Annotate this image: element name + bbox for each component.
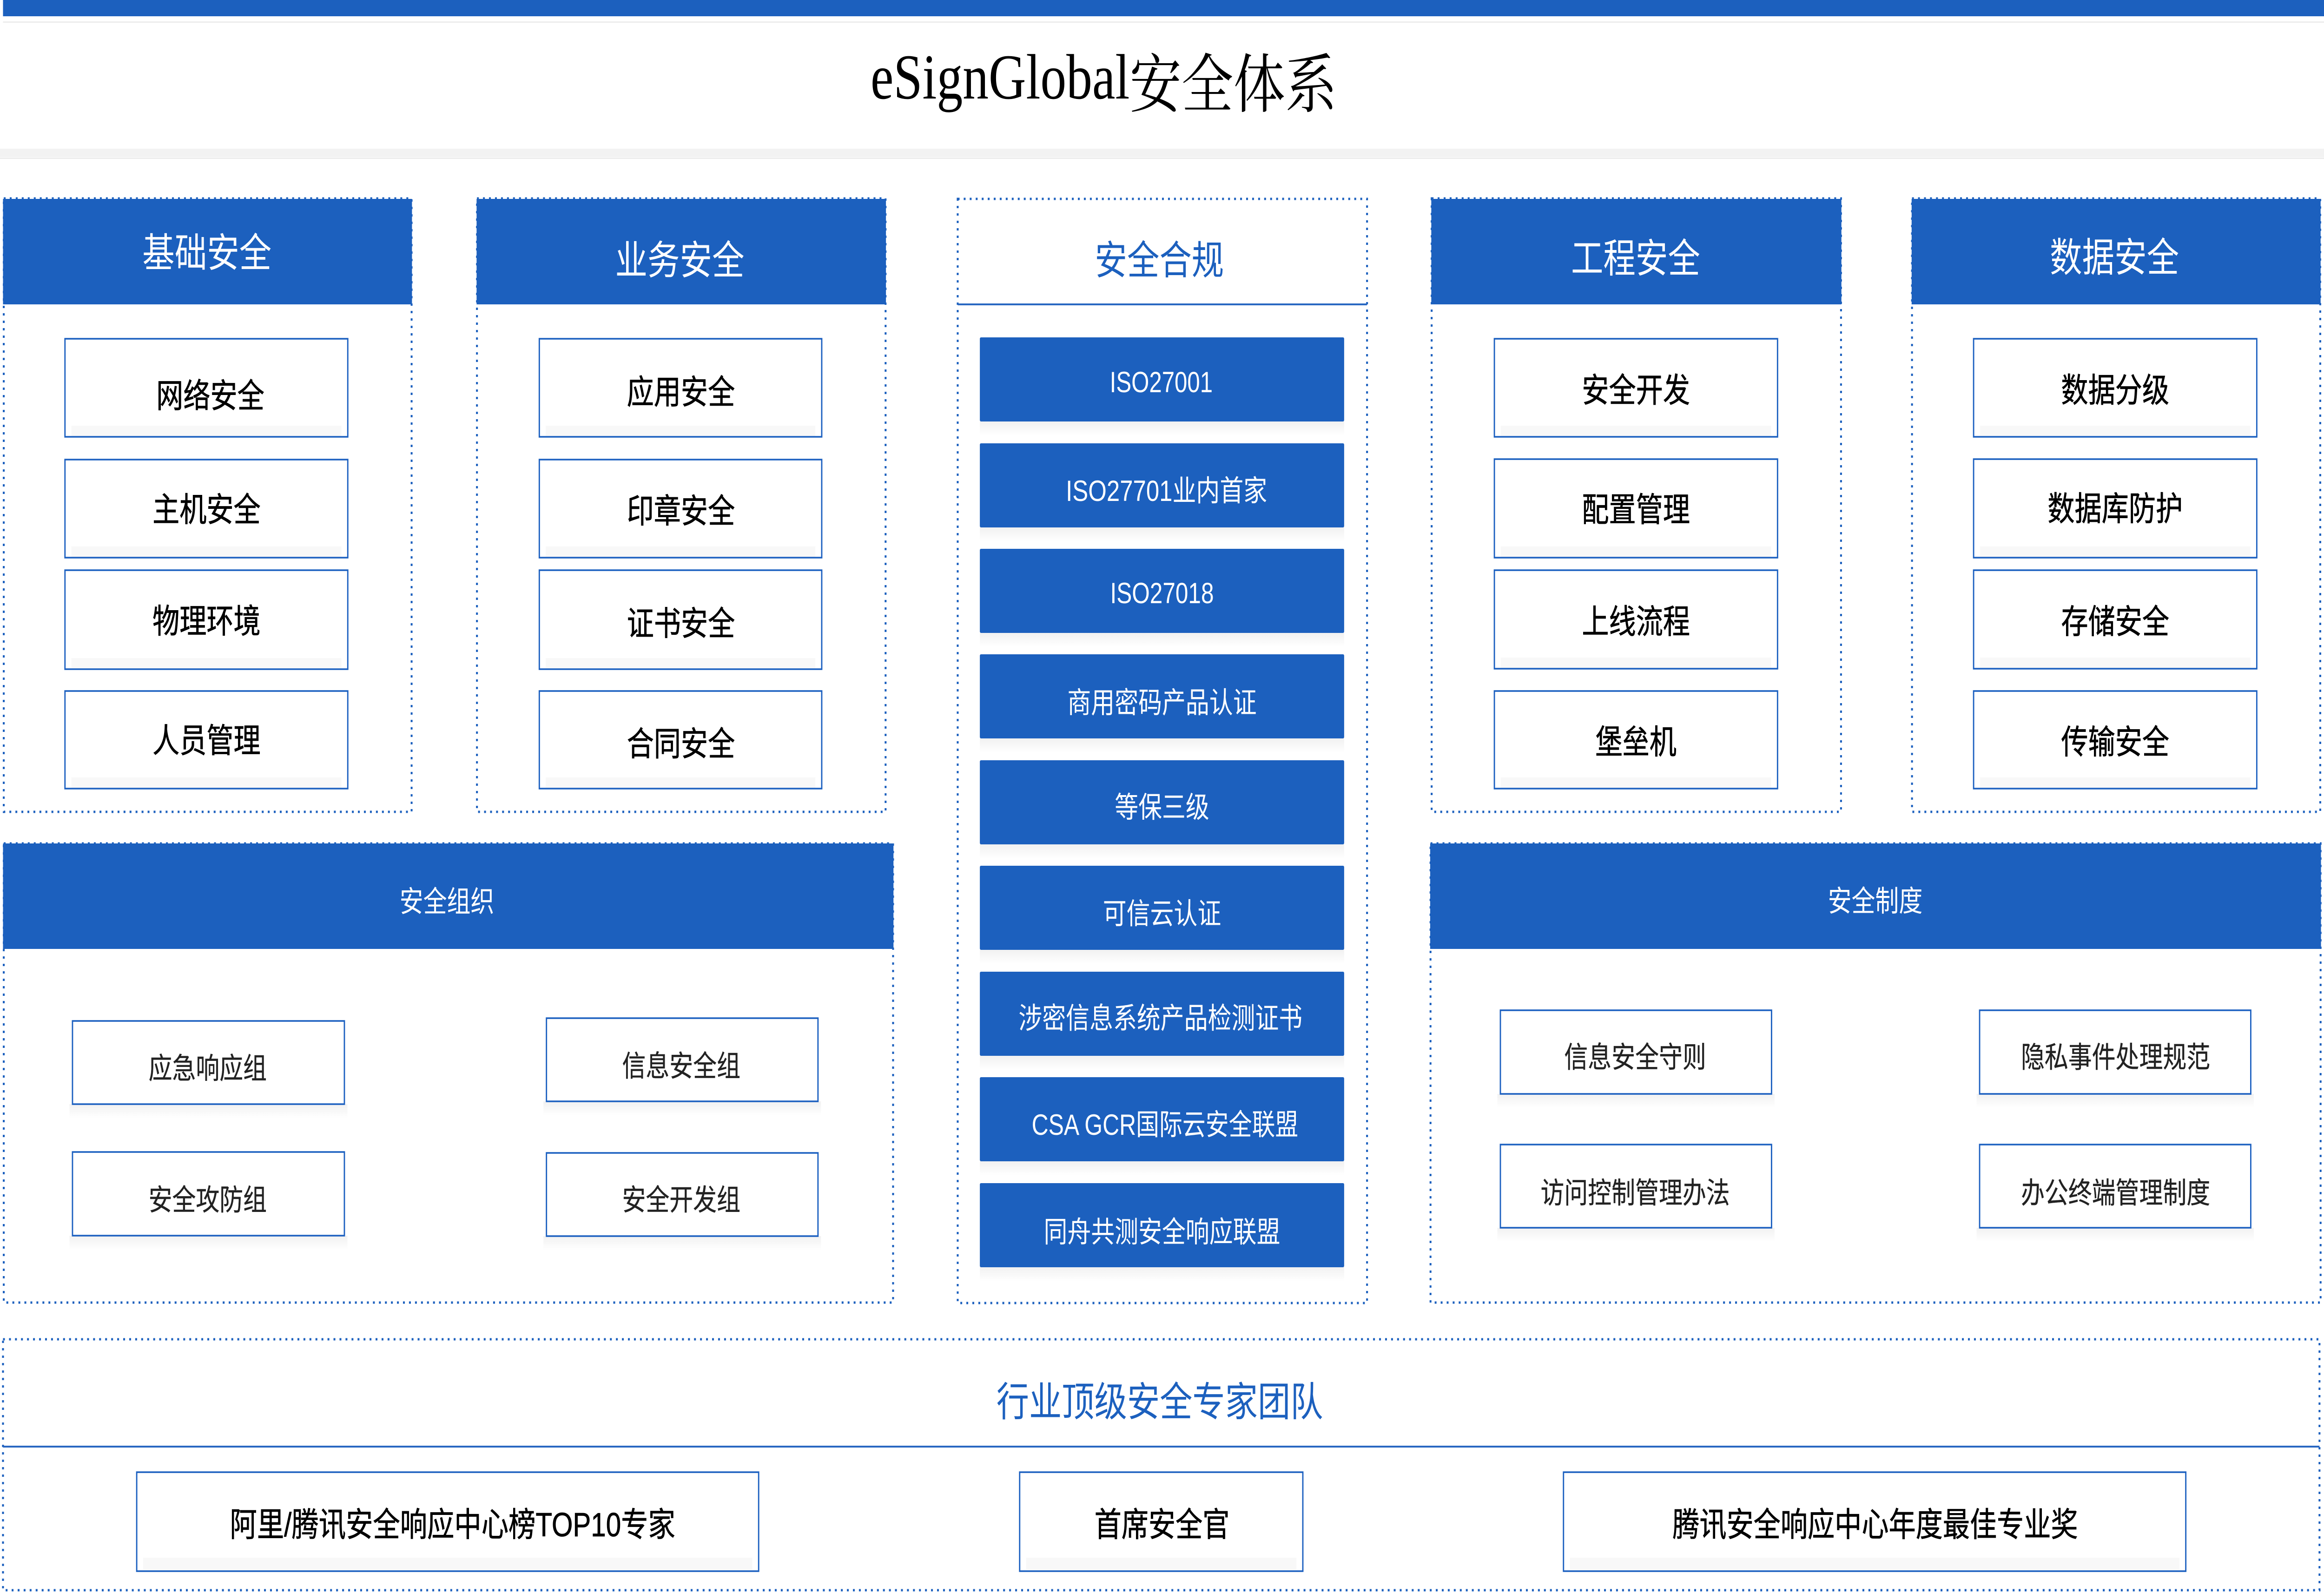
item: 堡垒机 bbox=[1494, 691, 1777, 789]
item: 阿里/腾讯安全响应中心榜TOP10专家: 阿里/腾讯安全响应中心榜TOP10专家 bbox=[230, 1506, 675, 1543]
item: 网络安全 bbox=[65, 339, 348, 437]
item: 腾讯安全响应中心年度最佳专业奖: 腾讯安全响应中心年度最佳专业奖 bbox=[1672, 1506, 2078, 1543]
item: ISO27018: ISO27018 bbox=[1110, 577, 1214, 610]
item: 等保三级: 等保三级 bbox=[1115, 791, 1209, 824]
item: 阿里/腾讯安全响应中心榜TOP10专家 bbox=[137, 1472, 759, 1571]
item: 信息安全守则 bbox=[1498, 1010, 1775, 1108]
item: 安全攻防组 bbox=[69, 1152, 347, 1250]
item: 网络安全: 网络安全 bbox=[156, 377, 264, 415]
item: 证书安全: 证书安全 bbox=[627, 605, 735, 642]
item: 合同安全: 合同安全 bbox=[627, 725, 735, 763]
item: 应用安全: 应用安全 bbox=[627, 374, 735, 411]
item: 应急响应组 bbox=[69, 1021, 347, 1118]
item: 主机安全: 主机安全 bbox=[152, 491, 261, 528]
item: 数据库防护 bbox=[1974, 459, 2257, 558]
panel: 基础安全 bbox=[3, 198, 412, 812]
item: 传输安全: 传输安全 bbox=[2061, 724, 2169, 761]
heading: 数据安全 bbox=[1912, 199, 2321, 304]
item: 隐私事件处理规范: 隐私事件处理规范 bbox=[2021, 1041, 2210, 1074]
item: 访问控制管理办法: 访问控制管理办法 bbox=[1541, 1177, 1730, 1210]
panel: 行业顶级安全专家团队 bbox=[3, 1339, 2319, 1590]
panel: 安全合规 bbox=[957, 199, 1367, 1303]
item: 印章安全 bbox=[539, 460, 822, 558]
item: 首席安全官: 首席安全官 bbox=[1095, 1506, 1229, 1543]
heading: 工程安全 bbox=[1431, 199, 1842, 304]
item: 配置管理 bbox=[1494, 459, 1777, 558]
top blue bar bbox=[3, 0, 2324, 16]
heading: 行业顶级安全专家团队: 行业顶级安全专家团队 bbox=[997, 1379, 1323, 1425]
item: 人员管理 bbox=[65, 691, 348, 789]
item: CSA GCR国际云安全联盟: CSA GCR国际云安全联盟 bbox=[1032, 1109, 1298, 1141]
item: 信息安全组: 信息安全组 bbox=[622, 1050, 740, 1083]
item: 印章安全: 印章安全 bbox=[627, 493, 735, 530]
heading: 基础安全 bbox=[3, 199, 412, 304]
item: 腾讯安全响应中心年度最佳专业奖 bbox=[1564, 1472, 2186, 1571]
item: 同舟共测安全响应联盟 bbox=[980, 1183, 1344, 1281]
heading: 安全制度: 安全制度 bbox=[1828, 885, 1922, 918]
item: ISO27701业内首家 bbox=[980, 443, 1344, 541]
item: 合同安全 bbox=[539, 691, 822, 789]
item: 商用密码产品认证: 商用密码产品认证 bbox=[1067, 687, 1257, 719]
heading: 业务安全 bbox=[476, 199, 886, 304]
item: 人员管理: 人员管理 bbox=[152, 722, 261, 759]
item: ISO27001: ISO27001 bbox=[1110, 366, 1213, 399]
panel: 数据安全 bbox=[1912, 198, 2321, 812]
item: 商用密码产品认证 bbox=[980, 654, 1344, 752]
item: 涉密信息系统产品检测证书: 涉密信息系统产品检测证书 bbox=[1018, 1002, 1302, 1035]
title panel bbox=[0, 21, 2324, 159]
item: 传输安全 bbox=[1974, 691, 2257, 789]
item: ISO27001 bbox=[980, 337, 1344, 435]
heading: 安全组织: 安全组织 bbox=[400, 886, 494, 918]
item: 物理环境 bbox=[65, 570, 348, 669]
heading: 基础安全: 基础安全 bbox=[142, 230, 271, 276]
item: 可信云认证: 可信云认证 bbox=[1103, 898, 1221, 930]
item: 安全开发: 安全开发 bbox=[1582, 372, 1690, 409]
item: 数据库防护: 数据库防护 bbox=[2047, 490, 2183, 527]
heading: 安全制度 bbox=[1430, 843, 2321, 949]
item: 信息安全组 bbox=[543, 1018, 821, 1115]
item: 应急响应组: 应急响应组 bbox=[149, 1053, 267, 1085]
item: 数据分级: 数据分级 bbox=[2061, 372, 2169, 409]
heading: 业务安全: 业务安全 bbox=[615, 238, 744, 283]
title: 安全体系 bbox=[1129, 50, 1337, 121]
panel: 安全组织 bbox=[3, 843, 893, 1303]
item: 访问控制管理办法 bbox=[1498, 1145, 1775, 1242]
item: ISO27701业内首家: ISO27701业内首家 bbox=[1066, 475, 1267, 507]
panel: 工程安全 bbox=[1431, 198, 1842, 812]
panel: 业务安全 bbox=[476, 198, 886, 812]
item: 证书安全 bbox=[539, 570, 822, 669]
item: CSA GCR国际云安全联盟 bbox=[980, 1077, 1344, 1175]
item: 涉密信息系统产品检测证书 bbox=[980, 972, 1344, 1070]
item: 数据分级 bbox=[1974, 339, 2257, 437]
item: 上线流程: 上线流程 bbox=[1582, 603, 1690, 640]
item: 安全开发组: 安全开发组 bbox=[622, 1184, 740, 1217]
panel: 安全制度 bbox=[1430, 843, 2321, 1303]
item: 隐私事件处理规范 bbox=[1977, 1010, 2254, 1108]
item: 安全攻防组: 安全攻防组 bbox=[149, 1184, 267, 1217]
item: 配置管理: 配置管理 bbox=[1582, 491, 1690, 528]
heading rule bbox=[957, 303, 1367, 305]
item: 主机安全 bbox=[65, 460, 348, 558]
item: 存储安全 bbox=[1974, 570, 2257, 669]
item: 物理环境: 物理环境 bbox=[152, 603, 261, 640]
title: eSignGlobal bbox=[871, 42, 1129, 113]
item: 首席安全官 bbox=[1020, 1472, 1303, 1571]
item: 存储安全: 存储安全 bbox=[2061, 603, 2169, 640]
heading: 安全组织 bbox=[3, 843, 893, 949]
item: 安全开发 bbox=[1494, 339, 1777, 437]
item: 同舟共测安全响应联盟: 同舟共测安全响应联盟 bbox=[1044, 1216, 1280, 1249]
heading: 安全合规: 安全合规 bbox=[1095, 238, 1224, 283]
heading: 工程安全: 工程安全 bbox=[1571, 236, 1700, 281]
item: 应用安全 bbox=[539, 339, 822, 437]
item: 信息安全守则: 信息安全守则 bbox=[1564, 1041, 1706, 1074]
item: 等保三级 bbox=[980, 760, 1344, 858]
item: 办公终端管理制度 bbox=[1977, 1145, 2254, 1242]
item: 可信云认证 bbox=[980, 866, 1344, 964]
heading rule bbox=[3, 1446, 2319, 1448]
item: 办公终端管理制度: 办公终端管理制度 bbox=[2021, 1177, 2210, 1210]
heading: 数据安全: 数据安全 bbox=[2050, 235, 2179, 280]
item: ISO27018 bbox=[980, 549, 1344, 647]
item: 上线流程 bbox=[1494, 570, 1777, 669]
item: 安全开发组 bbox=[543, 1153, 821, 1250]
item: 堡垒机: 堡垒机 bbox=[1595, 724, 1677, 761]
